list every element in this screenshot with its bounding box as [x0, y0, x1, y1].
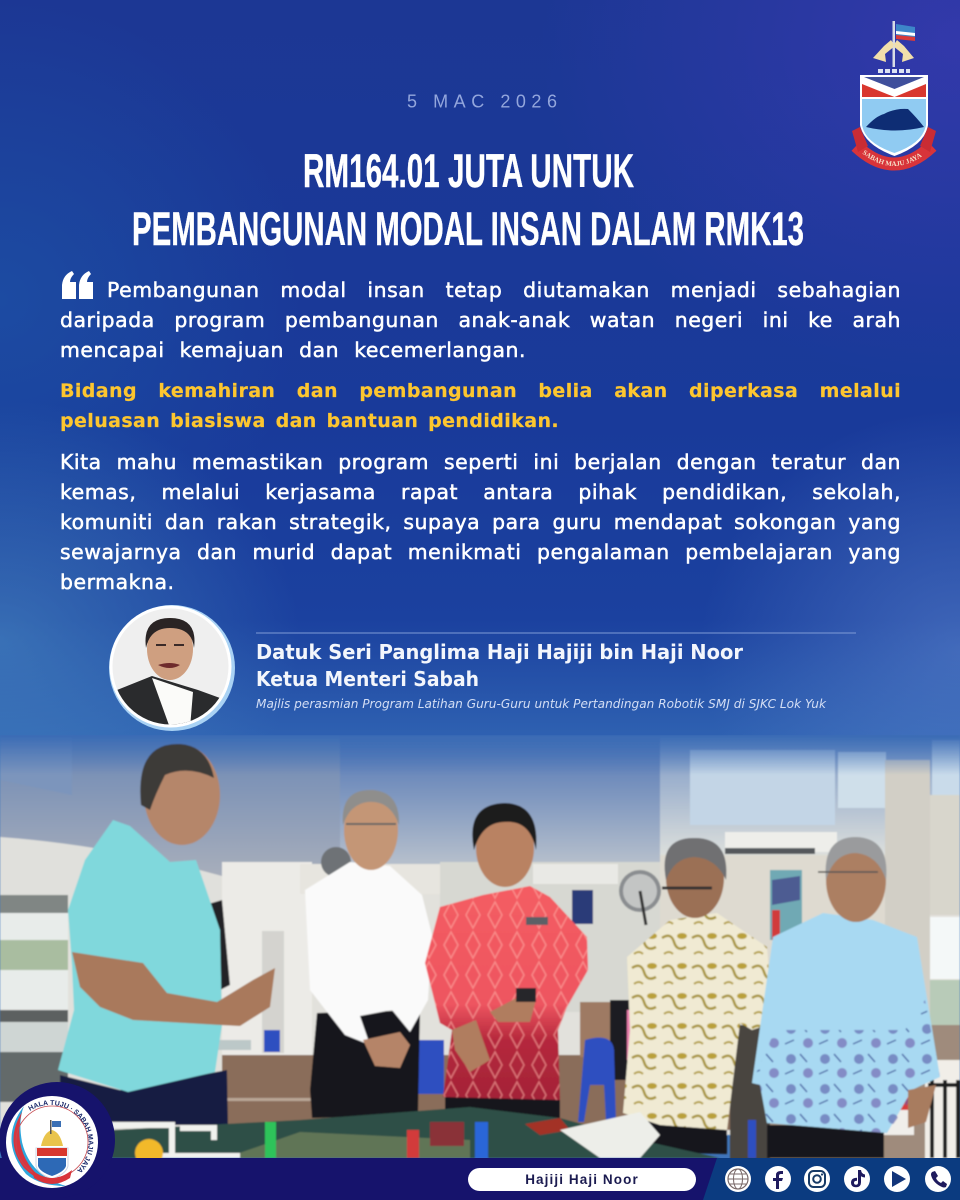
coat of arms of Sabah — [852, 21, 936, 170]
paragraph 2 highlighted — [60, 380, 901, 432]
bottom bar — [60, 1158, 960, 1200]
quotation text — [60, 271, 901, 594]
person: teal polo man — [58, 744, 275, 1125]
person: white shirt man — [305, 790, 432, 1118]
person: yellow batik man — [623, 838, 773, 1154]
badge: Hala Tuju Sabah Maju Jaya: HALA TUJU · SABAH MAJU JAYA — [28, 1100, 94, 1172]
date: 5 MAC 2026 — [407, 92, 557, 112]
person: red batik man — [425, 803, 588, 1120]
robotics table — [110, 1107, 720, 1167]
paragraph 3: komuniti dan rakan strategik, supaya para guru mendapat sokongan yang — [60, 510, 901, 534]
paragraph 1: mencapai kemajuan dan kecemerlangan. — [60, 338, 526, 362]
title — [132, 144, 804, 255]
badge: Hala Tuju Sabah Maju Jaya — [0, 1082, 115, 1188]
name pill: Hajiji Haji Noor — [525, 1172, 639, 1187]
paragraph 1 — [60, 278, 901, 362]
paragraph 3: sewajarnya dan murid dapat menikmati pengalaman pembelajaran yang — [60, 540, 901, 564]
portrait of speaker — [109, 605, 235, 731]
person: blue batik man — [752, 837, 940, 1158]
hall background — [0, 735, 960, 1160]
quote mark icon — [62, 271, 93, 299]
speaker details — [256, 632, 856, 711]
title: RM164.01 JUTA UNTUK — [303, 144, 634, 197]
photo: officials at robotics training table — [0, 736, 960, 1158]
paragraph 1: daripada program pembangunan anak-anak watan negeri ini ke arah — [60, 308, 901, 332]
paragraph 3 — [60, 450, 901, 594]
paragraph 3: Kita mahu memastikan program seperti ini berjalan dengan teratur dan — [60, 450, 901, 474]
paragraph 2 highlighted: Bidang kemahiran dan pembangunan belia akan diperkasa melalui — [60, 380, 901, 402]
social icons row — [725, 1166, 951, 1192]
blue chairs — [264, 1030, 756, 1158]
icon: play — [884, 1166, 910, 1192]
paragraph 3: bermakna. — [60, 570, 175, 594]
icon: tiktok — [844, 1166, 870, 1192]
wall fans — [321, 847, 661, 925]
name pill — [468, 1168, 696, 1191]
speaker details: Majlis perasmian Program Latihan Guru-Guru untuk Pertandingan Robotik SMJ di SJKC Lok Yuk — [256, 697, 827, 711]
paragraph 2 highlighted: peluasan biasiswa dan bantuan pendidikan. — [60, 410, 559, 432]
speaker details: Datuk Seri Panglima Haji Hajiji bin Haji Noor — [256, 640, 743, 664]
paragraph 1: Pembangunan modal insan tetap diutamakan menjadi sebahagian — [107, 278, 901, 302]
paragraph 3: kemas, melalui kerjasama rapat antara pihak pendidikan, sekolah, — [60, 480, 901, 504]
icon: facebook — [765, 1166, 791, 1192]
icon: instagram — [804, 1166, 830, 1192]
icon: phone — [925, 1166, 951, 1192]
speaker details: Ketua Menteri Sabah — [256, 667, 479, 691]
coat of arms of Sabah: SABAH MAJU JAYA — [862, 150, 922, 166]
photo top fade — [0, 735, 960, 775]
icon: globe — [725, 1166, 751, 1192]
